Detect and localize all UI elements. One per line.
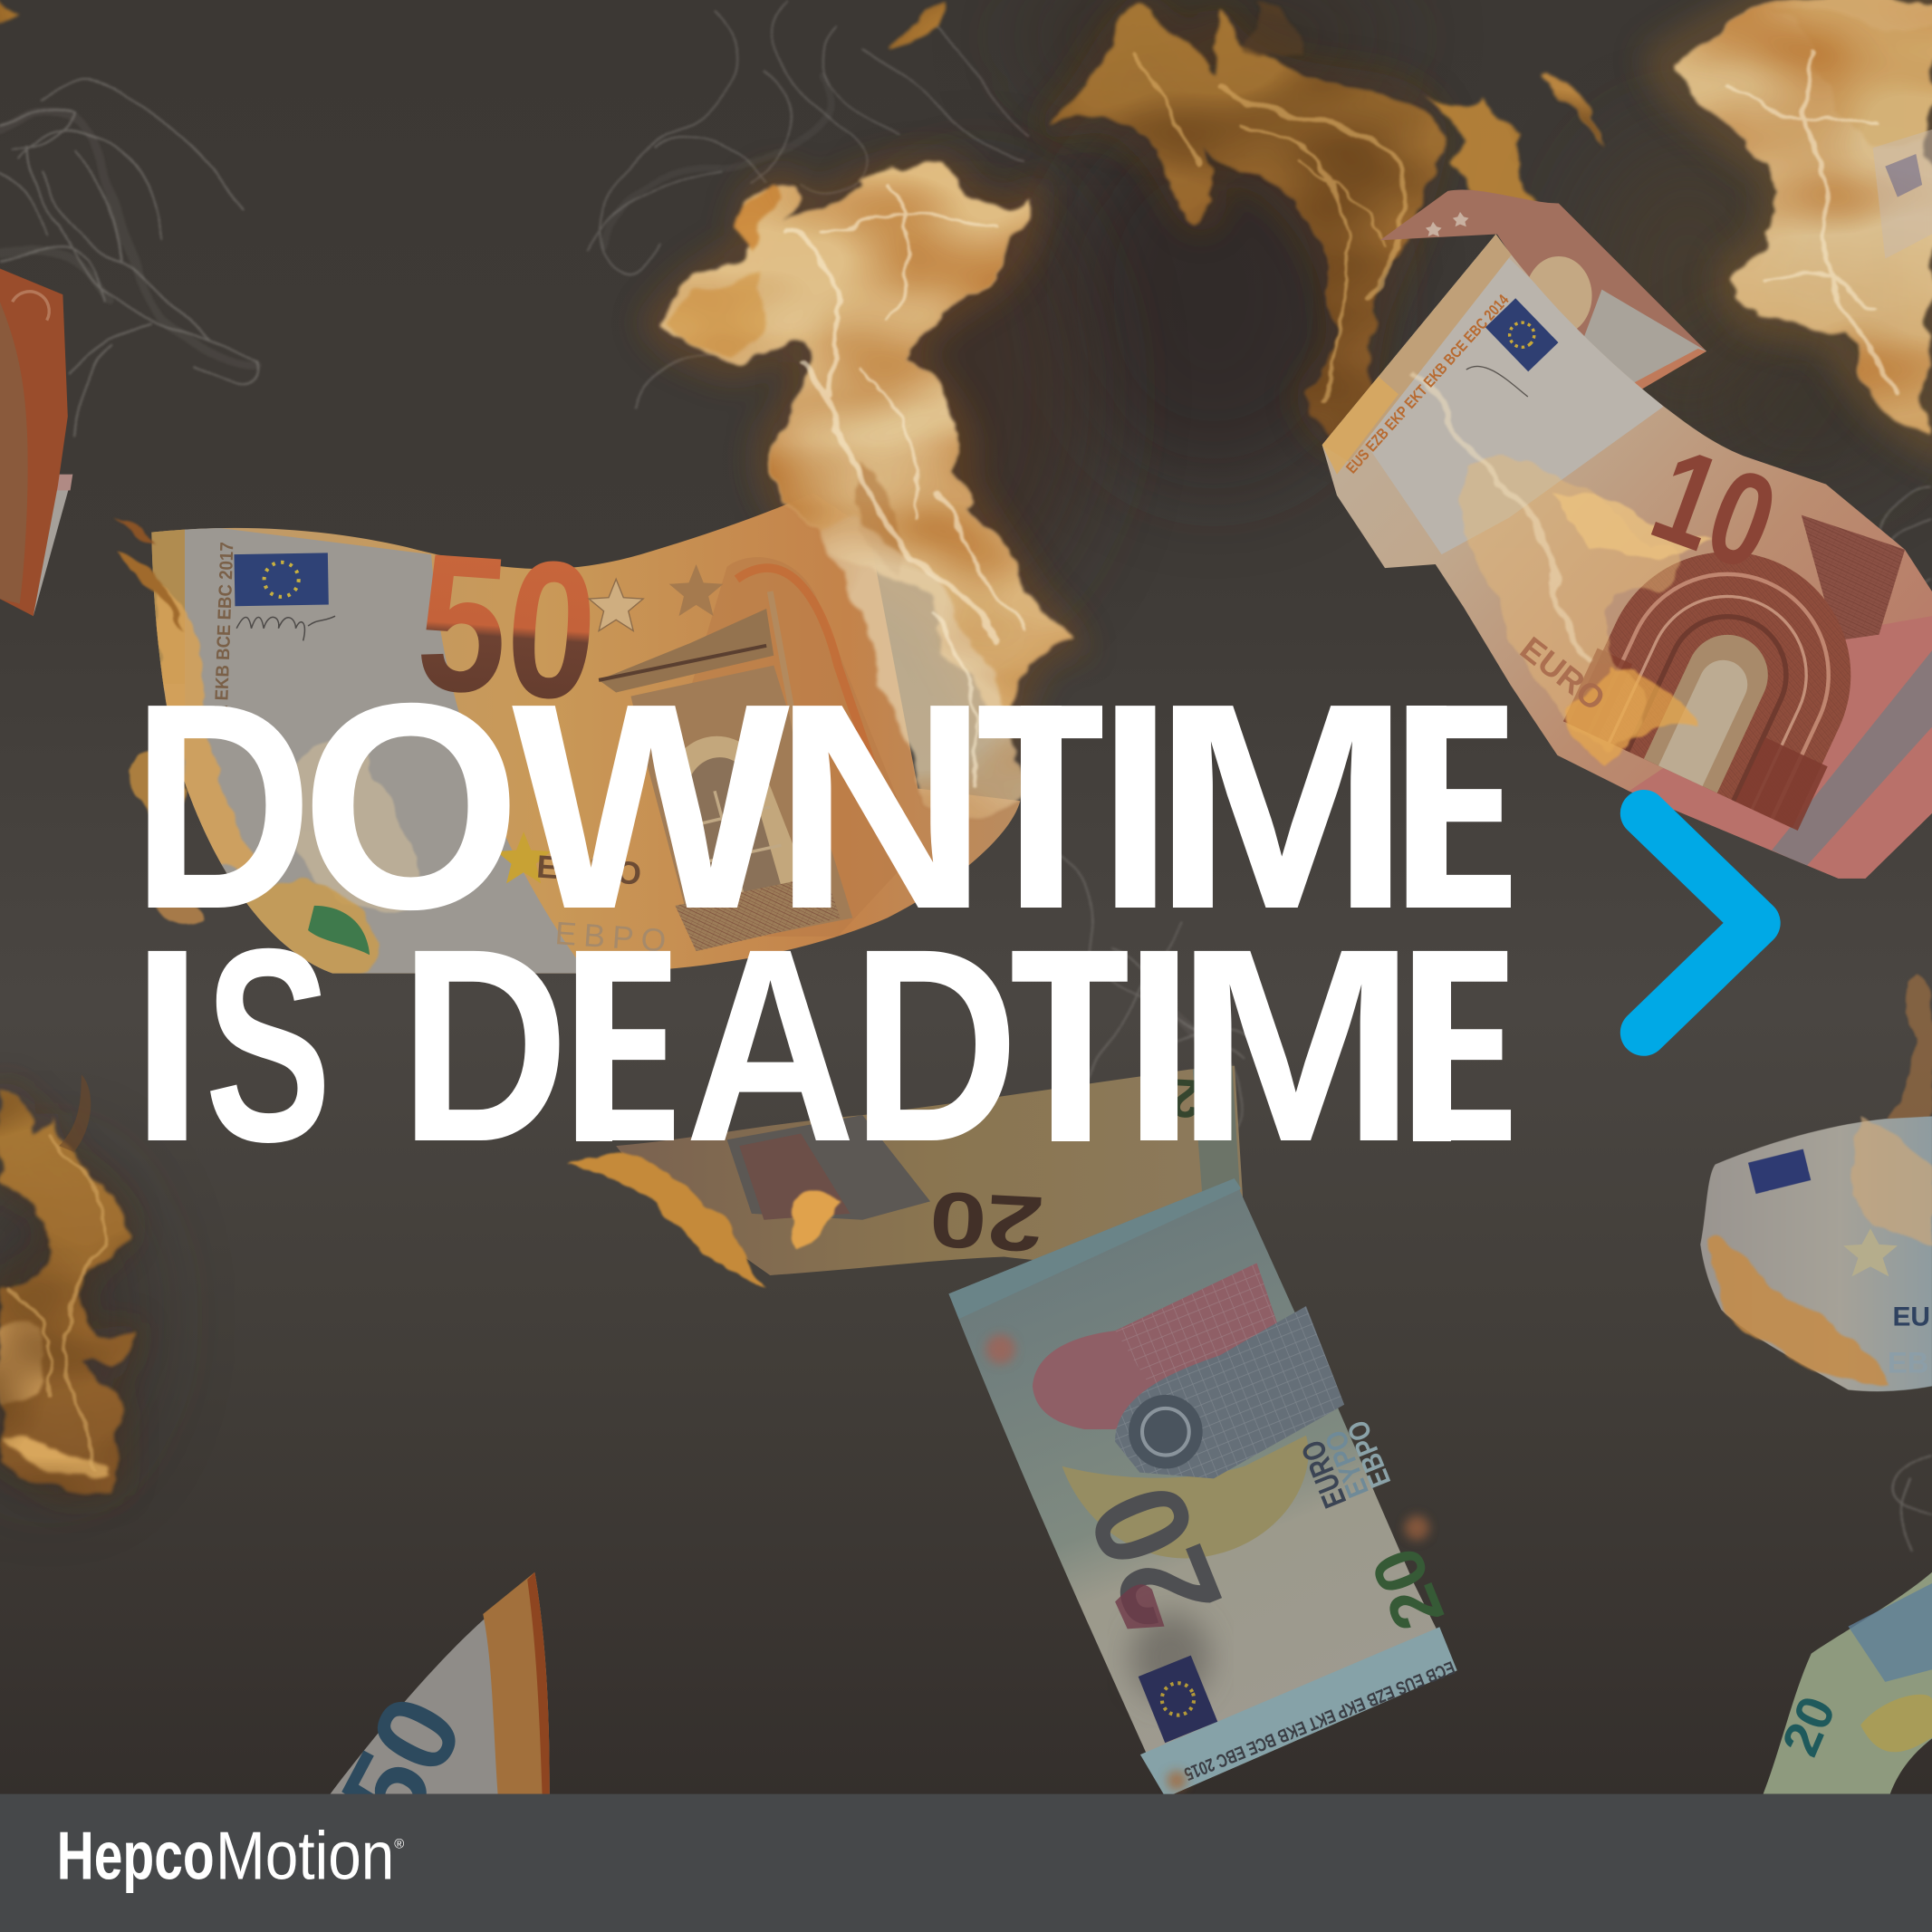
building bbox=[630, 666, 852, 948]
note: upside-down 20 euro, horizontal bbox=[569, 1066, 1247, 1292]
smoke: right edge bbox=[1879, 486, 1932, 1552]
note: 20 euro fragment, bottom right: 20 bbox=[1771, 1688, 1847, 1764]
white watermark area and edge strip bbox=[1350, 253, 1663, 554]
footer bar bbox=[0, 1794, 1932, 1932]
flame: tail left of 50 note bbox=[113, 517, 205, 926]
note: upside-down 20 euro, horizontal: 20 bbox=[1139, 1066, 1202, 1129]
note fragment: inside top right flame bbox=[1873, 130, 1932, 259]
note: bottom code text: ECB EUS EZB EKP EKT EKB BCE EBC 2015 bbox=[1181, 1657, 1457, 1783]
title: DOWNTIME IS DEADTIME: T bbox=[976, 642, 1105, 970]
note: 20 digits on large note: 20 bbox=[1060, 1465, 1251, 1648]
flame: top centre-right amber flame bbox=[1047, 0, 1435, 440]
note: 10 euro back fold bbox=[1380, 189, 1706, 397]
title: DOWNTIME IS DEADTIME: I bbox=[1097, 642, 1173, 970]
title: DOWNTIME IS DEADTIME: S bbox=[205, 892, 332, 1199]
flame: small glow points on large 20 note bbox=[985, 1334, 1429, 1791]
title: DOWNTIME IS DEADTIME: D bbox=[851, 892, 1019, 1199]
logo: HepcoMotion: ® bbox=[394, 1836, 404, 1851]
note: EURO EYPO EBPO text: EURO bbox=[1295, 1436, 1353, 1513]
flame: left edge flame bbox=[0, 1091, 133, 1493]
title: DOWNTIME IS DEADTIME: M bbox=[1152, 642, 1411, 970]
title: DOWNTIME IS DEADTIME: I bbox=[1123, 892, 1195, 1199]
title: DOWNTIME IS DEADTIME bbox=[130, 642, 1518, 1199]
flame: fringe glow behind amber and cream flames bbox=[0, 0, 1932, 1493]
note: 50 euro fragment, bottom left: 50 bbox=[316, 1677, 487, 1848]
flame: right edge faded flame bbox=[1883, 974, 1932, 1139]
title: DOWNTIME IS DEADTIME: E bbox=[1401, 892, 1518, 1199]
title: DOWNTIME IS DEADTIME: N bbox=[773, 642, 989, 970]
gothic window blue bbox=[1115, 1306, 1344, 1478]
note: green 20: 20 bbox=[1356, 1537, 1459, 1640]
note: burnt white fragment, right edge bbox=[1700, 1115, 1932, 1391]
title: DOWNTIME IS DEADTIME: W bbox=[512, 642, 790, 970]
dark smoke halos behind flames bbox=[0, 0, 1910, 1478]
note: EU flag bbox=[1124, 1230, 1183, 1257]
title: DOWNTIME IS DEADTIME: I bbox=[130, 892, 204, 1199]
title: DOWNTIME IS DEADTIME: M bbox=[1175, 892, 1417, 1199]
note: strip text: EUS EZB EKP EKT EKB BCE EBC 2014 bbox=[1342, 291, 1513, 476]
smoke: top centre bbox=[588, 0, 1029, 407]
logo: HepcoMotion: Motion bbox=[216, 1818, 394, 1894]
note: large 20 euro, tilted bbox=[948, 1170, 1460, 1802]
note: EURO text: EURO bbox=[1514, 630, 1612, 718]
note: 50 euro fragment, bottom left bbox=[316, 1572, 550, 1848]
smoke: upper left bbox=[0, 82, 257, 434]
title: DOWNTIME IS DEADTIME: D bbox=[399, 892, 569, 1199]
note: burnt white fragment, right edge: EB bbox=[1888, 1345, 1928, 1379]
flame: main flame rising from 50 note bbox=[659, 169, 1066, 823]
yellow hologram area bbox=[1062, 1436, 1309, 1558]
title: DOWNTIME IS DEADTIME: T bbox=[1010, 892, 1129, 1199]
arrow: blue chevron bbox=[1644, 813, 1757, 1033]
EU flag bbox=[1139, 1656, 1217, 1743]
title: DOWNTIME IS DEADTIME: E bbox=[564, 892, 681, 1199]
title: DOWNTIME IS DEADTIME: A bbox=[685, 892, 856, 1199]
brick panel above arch bbox=[1802, 515, 1905, 640]
logo: HepcoMotion: Hepco bbox=[57, 1818, 215, 1894]
note: 10 digits: 10 bbox=[1635, 419, 1794, 599]
title: DOWNTIME IS DEADTIME: O bbox=[301, 642, 522, 970]
flame: faded tail above left flame bbox=[59, 1074, 91, 1152]
flames over note bbox=[1460, 457, 1680, 752]
smoke: behind title bbox=[1035, 838, 1269, 1146]
arch bbox=[1563, 553, 1851, 831]
note: signature bbox=[236, 616, 335, 640]
smudge bbox=[1131, 1613, 1210, 1702]
note: 10 euro burning bbox=[1322, 234, 1932, 879]
pink lower area and grey security band bbox=[1629, 616, 1932, 879]
note: 20 digits upside down: 20 bbox=[928, 1175, 1046, 1268]
lower left burn bbox=[154, 579, 264, 887]
note: stars bbox=[496, 564, 724, 883]
note: EU flag bbox=[1485, 298, 1558, 371]
flame: top right cream flame bbox=[1666, 0, 1932, 437]
note: strip text: EZ EKB BCE EBC 2017 bbox=[211, 542, 237, 727]
title: DOWNTIME IS DEADTIME: D bbox=[131, 642, 313, 970]
note: 50 digits: 50 bbox=[411, 512, 603, 742]
flames at burnt left edge bbox=[569, 1156, 838, 1292]
note: large 20 euro, tilted: EYPO bbox=[1318, 1426, 1375, 1503]
note: EURO lettering: EU bbox=[1892, 1302, 1930, 1332]
note: EURO lettering: EURO bbox=[535, 850, 642, 892]
logo: HepcoMotion bbox=[57, 1818, 404, 1894]
note: red euro fragment, left edge bbox=[0, 269, 72, 616]
note: 50 euro burning: EBPO bbox=[554, 916, 667, 959]
title: DOWNTIME IS DEADTIME: E bbox=[1394, 642, 1518, 970]
flame: small tongues above the 10 note bbox=[0, 0, 1613, 216]
note: 20 euro fragment, bottom right bbox=[1764, 1572, 1932, 1794]
note: 50 euro burning bbox=[148, 493, 1020, 984]
note: EU flag bbox=[234, 553, 329, 606]
note: large 20 euro, tilted: EBPO bbox=[1340, 1416, 1397, 1493]
gothic window pink bbox=[1033, 1263, 1283, 1429]
